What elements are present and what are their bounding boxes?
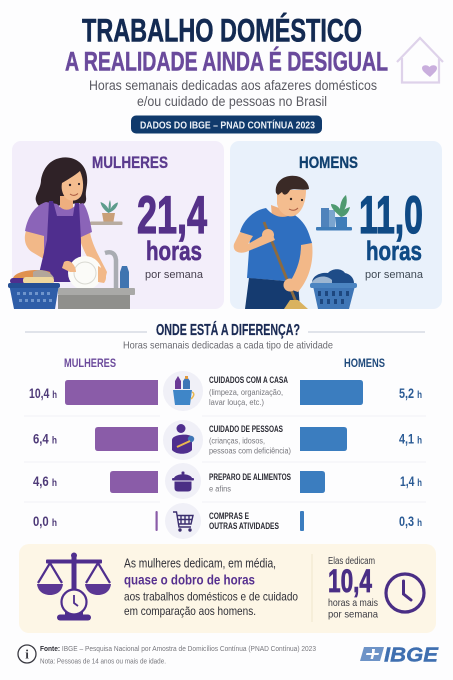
stat: 10,4 horas a mais: por semana	[328, 608, 378, 620]
icon: info	[18, 645, 36, 663]
stat: 21,4 horas por semana: 21,4	[137, 186, 207, 245]
icon: caregiver	[163, 420, 203, 460]
icon: house with heart	[397, 38, 443, 82]
laundry basket	[312, 269, 354, 283]
label: cuidado de pessoas: (crianças, idosos,	[209, 436, 265, 446]
bar: mulheres 10,4	[65, 380, 158, 405]
label: cuidados com a casa	[209, 375, 288, 407]
bar: mulheres 0,0	[156, 511, 158, 531]
section heading: onde está a diferença: Horas semanais dedicadas a cada tipo de atividade	[123, 340, 333, 352]
footer: source	[18, 645, 316, 666]
value: mulheres 6,4 h: 6,4 h	[33, 432, 57, 446]
stat: 10,4 horas a mais	[328, 556, 378, 620]
header	[65, 12, 443, 134]
right arm	[286, 243, 312, 292]
neck	[60, 196, 73, 214]
icon: cooking pot	[165, 463, 201, 499]
row: preparo de alimentos	[33, 463, 422, 499]
bar: mulheres 4,6	[110, 471, 158, 493]
section heading: onde está a diferença	[25, 322, 425, 352]
row: cuidados com a casa	[29, 371, 422, 411]
bar: mulheres 6,4	[95, 427, 158, 451]
logo: IBGE: IBGE	[384, 644, 439, 666]
label: cuidados com a casa: (limpeza, organização,	[209, 388, 283, 397]
value: homens 4,1 h: 4,1 h	[399, 432, 422, 446]
broom handle	[264, 222, 296, 302]
label: compras e outras atividades: COMPRAS E	[209, 511, 249, 522]
stat: 11,0 horas por semana: horas	[366, 236, 422, 266]
logo: IBGE	[360, 644, 439, 666]
column label: homens: HOMENS	[344, 358, 385, 370]
description: e/ou cuidado de pessoas no Brasil	[137, 94, 327, 109]
value: homens 0,3 h: 0,3 h	[399, 514, 422, 529]
stat: 21,4 horas por semana: por semana	[145, 269, 204, 281]
panel heading: mulheres: MULHERES	[92, 153, 168, 172]
shelf and plant	[90, 222, 122, 225]
plate	[68, 256, 102, 290]
stat: 11,0 horas por semana	[359, 186, 424, 281]
face	[277, 190, 306, 216]
neck	[271, 205, 290, 222]
section heading: onde está a diferença: ONDE ESTÁ A DIFERENÇA?	[156, 322, 300, 339]
hair	[36, 157, 87, 209]
source badge	[131, 116, 322, 134]
label: compras e outras atividades: OUTRAS ATIVIDADES	[209, 521, 279, 532]
icon: info: i	[25, 646, 29, 662]
source text	[40, 646, 316, 666]
stat: 21,4 horas por semana	[137, 186, 207, 281]
source text: Nota: Pessoas de 14 anos ou mais de idade.	[40, 658, 166, 666]
row: cuidado de pessoas	[33, 420, 422, 460]
label: cuidado de pessoas: CUIDADO DE PESSOAS	[209, 424, 283, 435]
label: cuidados com a casa: CUIDADOS COM A CASA	[209, 375, 288, 386]
callout text: em comparação aos homens.	[124, 604, 256, 618]
shirt	[25, 202, 92, 270]
row: compras e outras atividades	[33, 503, 422, 539]
label: cuidado de pessoas	[209, 424, 291, 456]
icon: clock	[386, 574, 424, 612]
row dividers	[24, 416, 426, 502]
bar: homens 4,1	[300, 427, 347, 451]
soap bottle	[120, 266, 129, 288]
label: preparo de alimentos: e afins	[209, 484, 231, 494]
panel: callout	[19, 544, 436, 633]
description: Horas semanais dedicadas aos afazeres domésticos	[89, 78, 377, 93]
panel: mulheres	[8, 141, 224, 309]
callout text: As mulheres dedicam, em média,	[124, 556, 276, 570]
illustration: woman washing dishes	[8, 157, 135, 309]
shelf, books and plant	[316, 227, 352, 230]
label: preparo de alimentos	[209, 472, 291, 494]
basket with clothes	[12, 270, 54, 284]
shirt	[240, 208, 312, 282]
label: preparo de alimentos: PREPARO DE ALIMENTOS	[209, 472, 291, 483]
label: cuidados com a casa: lavar louça, etc.)	[209, 398, 264, 407]
bar: homens 1,4	[300, 471, 325, 493]
stat: 10,4 horas a mais: Elas dedicam	[328, 556, 375, 567]
faucet	[105, 252, 116, 288]
bar: homens 0,3	[300, 511, 304, 531]
value: homens 1,4 h: 1,4 h	[400, 474, 422, 489]
title: TRABALHO DOMÉSTICO	[82, 12, 362, 48]
label: cuidado de pessoas: pessoas com deficiência)	[209, 446, 291, 456]
stat: 10,4 horas a mais: 10,4	[328, 563, 372, 599]
bar: homens 5,2	[300, 380, 363, 405]
value: mulheres 4,6 h: 4,6 h	[33, 474, 57, 489]
icon: cleaning bucket	[163, 371, 203, 411]
apron	[37, 201, 81, 282]
left arm	[234, 231, 275, 253]
column label: mulheres: MULHERES	[64, 358, 116, 370]
value: homens 5,2 h: 5,2 h	[399, 386, 422, 401]
stat: 10,4 horas a mais: horas a mais	[328, 597, 378, 609]
description	[89, 78, 377, 109]
value: mulheres 10,4 h: 10,4 h	[29, 386, 57, 401]
left arm	[25, 231, 70, 271]
panel heading: homens: HOMENS	[299, 153, 358, 172]
hair	[276, 176, 309, 195]
value: mulheres 0,0 h: 0,0 h	[33, 514, 57, 529]
label: compras e outras atividades	[209, 511, 279, 532]
callout text: aos trabalhos domésticos e de cuidado	[124, 590, 298, 604]
stat: 21,4 horas por semana: horas	[146, 236, 202, 266]
face	[62, 171, 83, 201]
sink	[58, 288, 135, 295]
source text: Fonte: IBGE – Pesquisa Nacional por Amostra de Domicílios Contínua (PNAD Contínua) 2023	[40, 646, 316, 653]
callout text	[124, 556, 298, 618]
icon: shopping cart	[165, 503, 201, 539]
panel: homens	[230, 141, 442, 309]
source badge: DADOS DO IBGE – PNAD CONTÍNUA 2023	[140, 118, 315, 132]
callout text: quase o dobro de horas	[124, 572, 255, 588]
stat: 11,0 horas por semana: por semana	[365, 269, 424, 281]
pants	[245, 278, 300, 309]
right arm	[79, 232, 107, 280]
illustration: man sweeping	[234, 176, 357, 309]
icon: scale with clock	[37, 552, 111, 620]
broom head	[284, 300, 308, 309]
